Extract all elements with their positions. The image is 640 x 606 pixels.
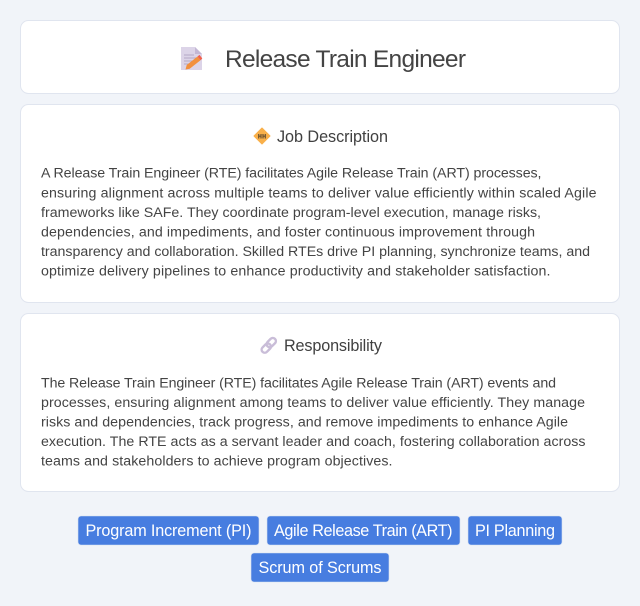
text block: responsibility: processes, ensuring alignment among teams to deliver value efficiently. They manage	[41, 395, 585, 411]
text block: job description	[41, 166, 597, 280]
tag: PI Planning	[468, 516, 562, 545]
tag: Scrum of Scrums	[251, 553, 389, 582]
text block: responsibility: execution. The RTE acts as a servant leader and coach, fostering collaboration across	[41, 434, 586, 450]
tag: Agile Release Train (ART): Agile Release Train (ART)	[274, 522, 452, 540]
tag: Agile Release Train (ART)	[267, 516, 460, 545]
text block: job description: ensuring alignment across multiple teams to deliver value efficiently within scaled Agile	[41, 185, 597, 201]
text block: job description: frameworks like SAFe. They coordinate program-level execution, manage risks,	[41, 205, 541, 221]
icon: chain link	[260, 337, 277, 354]
text block: job description: dependencies, and impediments, and foster continuous improvement through	[41, 224, 535, 240]
title: Release Train Engineer	[225, 46, 466, 73]
text block: responsibility	[41, 376, 586, 470]
panel: responsibility	[20, 314, 620, 492]
text block: responsibility: teams and stakeholders to achieve program objectives.	[41, 454, 392, 470]
tag: Scrum of Scrums: Scrum of Scrums	[258, 559, 382, 577]
icon: orange diamond sign	[254, 128, 270, 144]
text block: job description: A Release Train Engineer (RTE) facilitates Agile Release Train (ART) processes,	[41, 166, 542, 182]
panel: title card	[20, 20, 620, 94]
heading: responsibility: Responsibility	[284, 337, 383, 355]
text block: responsibility: risks and dependencies, track progress, and remove impediments to enhance Agile	[41, 414, 568, 430]
tag: PI Planning: PI Planning	[475, 522, 555, 540]
tag: Program Increment (PI): Program Increment (PI)	[86, 522, 252, 540]
icon: document with pencil	[181, 47, 202, 70]
text block: job description: transparency and collaboration. Skilled RTEs drive PI planning, synchronize teams, and	[41, 244, 590, 260]
text block: responsibility: The Release Train Engineer (RTE) facilitates Agile Release Train (ART) events and	[41, 376, 556, 392]
heading: job description: Job Description	[277, 128, 388, 146]
text block: job description: optimize delivery pipelines to enhance productivity and stakeholder satisfaction.	[41, 264, 550, 280]
panel: job description	[20, 104, 620, 302]
tag: Program Increment (PI)	[78, 516, 259, 545]
